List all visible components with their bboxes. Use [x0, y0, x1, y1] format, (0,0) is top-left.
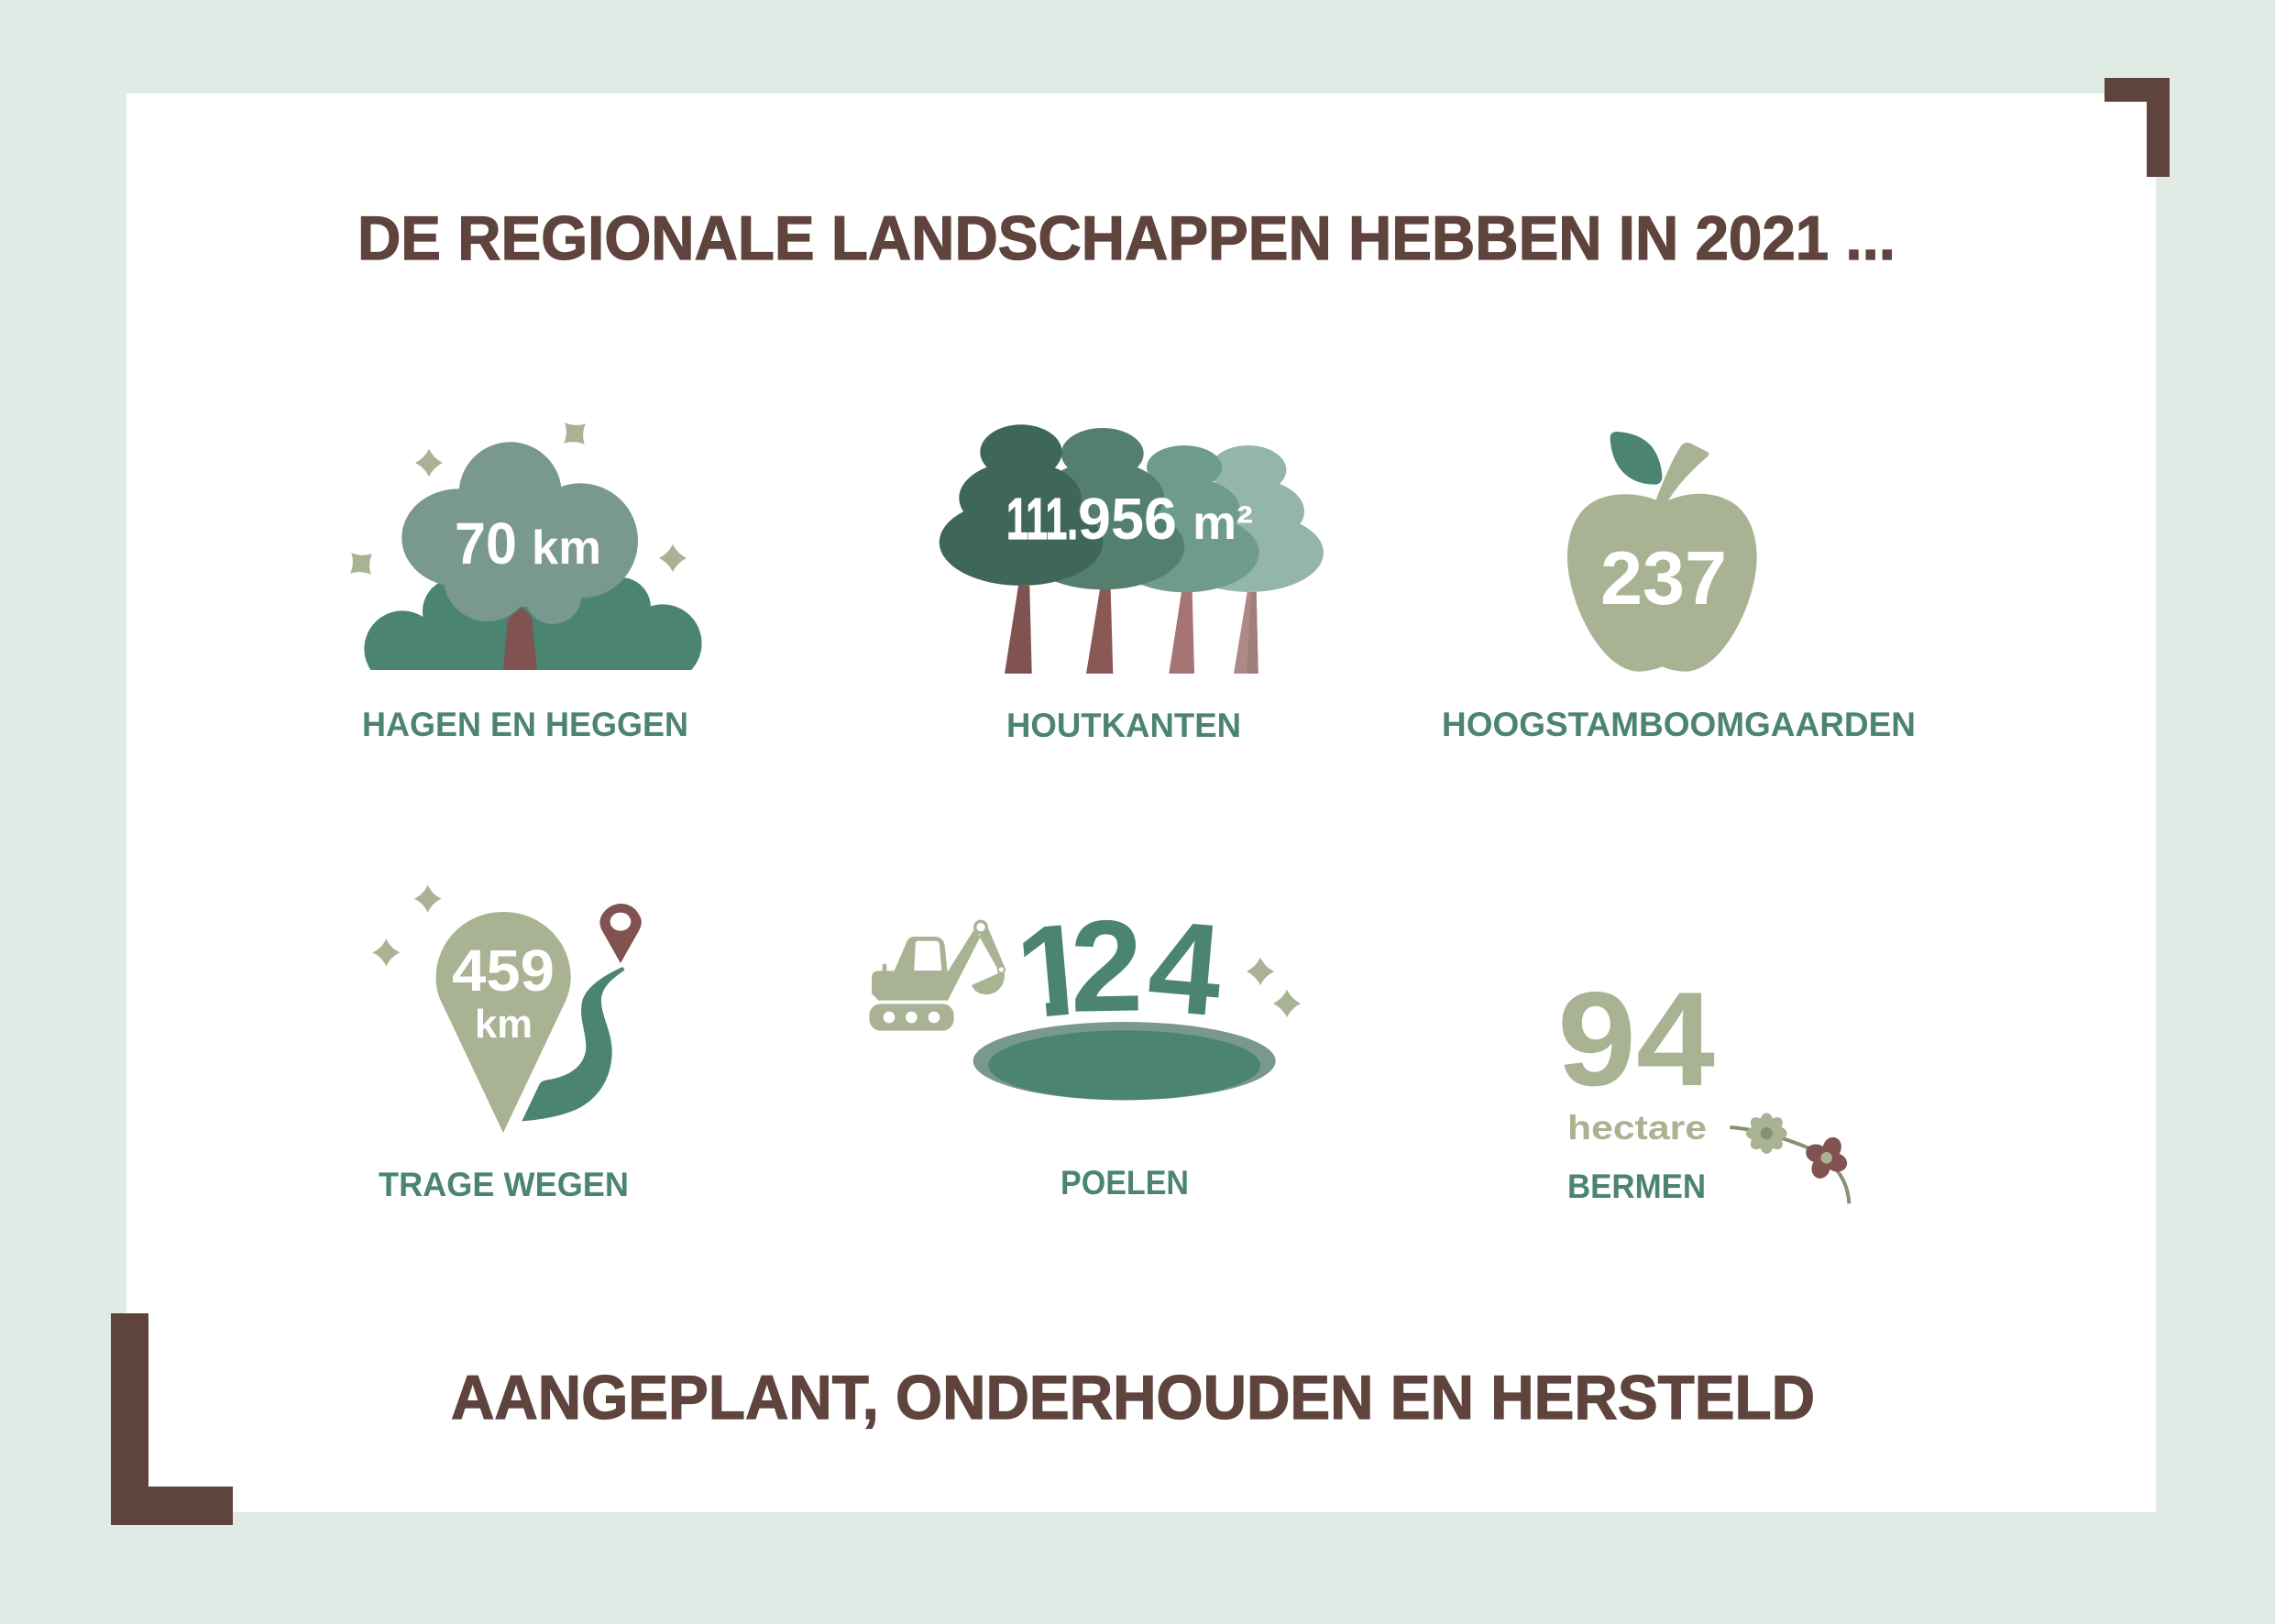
corner bracket: top right: [2105, 78, 2170, 177]
icon: tree 1: [940, 424, 1103, 674]
unit: hectare: hectare: [1567, 1109, 1707, 1147]
label: houtkanten: HOUTKANTEN: [1006, 707, 1241, 744]
label: trage wegen: TRAGE WEGEN: [379, 1166, 629, 1203]
excavator window: [914, 941, 941, 971]
icon: flowers on stem: [1730, 1113, 1850, 1203]
icon: tree 2: [1021, 428, 1184, 674]
value: 459 km: 459: [452, 938, 555, 1004]
excavator bucket: [972, 973, 1005, 994]
apple body: [1567, 443, 1757, 672]
corner bracket: bottom left: [111, 1313, 233, 1525]
value: 70 km: km: [532, 521, 601, 575]
green flower: [1746, 1113, 1787, 1154]
excavator track: [869, 1004, 954, 1031]
winding road: [522, 967, 625, 1121]
sparkles: [340, 412, 687, 585]
value: 459 km: [452, 938, 555, 1047]
panel: houtkanten: [940, 424, 1324, 744]
panel: hagen en heggen: [340, 412, 702, 743]
value: 124: 1: [1011, 895, 1095, 1047]
red flower: [1803, 1135, 1850, 1181]
value: 124: 2: [1069, 893, 1144, 1040]
value: 70 km: 70: [455, 510, 517, 576]
sparkles: [1247, 958, 1301, 1017]
excavator body: [872, 928, 980, 1001]
value: 70 km: [455, 510, 601, 576]
value: 124: 4: [1143, 893, 1228, 1044]
icon: pond: [973, 1022, 1276, 1100]
stem: [1730, 1127, 1849, 1203]
value: 111.956 m²: [1006, 486, 1253, 552]
panel: bermen: [1557, 964, 1850, 1205]
icon: tree trunk: [503, 608, 537, 670]
icon: tree 4: [1175, 445, 1324, 674]
label: hagen en heggen: HAGEN EN HEGGEN: [362, 706, 688, 743]
icon: tree crown: [401, 442, 638, 624]
value: 111.956 m²: 956: [1078, 486, 1177, 552]
icon: hedge: [364, 577, 702, 670]
pond water: [988, 1030, 1260, 1100]
excavator arm: [979, 927, 1005, 971]
value: 111.956 m²: m²: [1192, 497, 1253, 550]
sparkle: [414, 885, 442, 913]
pond rim: [973, 1022, 1276, 1100]
large pin: [436, 912, 571, 1133]
excavator joints: [973, 920, 1006, 974]
closing line: AANGEPLANT, ONDERHOUDEN EN HERSTELD: [451, 1363, 1815, 1432]
value: 459 km: km: [475, 1002, 533, 1047]
label: bermen: BERMEN: [1567, 1168, 1706, 1205]
panel: trage wegen: [372, 885, 642, 1203]
icon: excavator: [869, 920, 1006, 1031]
sparkle: [372, 938, 400, 966]
apple leaf: [1610, 432, 1662, 485]
white panel: [126, 93, 2156, 1512]
value: 111.956 m²: 111.: [1006, 486, 1078, 552]
panel: poelen: [869, 920, 1301, 1195]
label: hoogstamboomgaarden: HOOGSTAMBOOMGAARDEN: [1442, 706, 1916, 743]
icon: tree 3: [1111, 445, 1259, 674]
label: poelen: POELEN: [1061, 1164, 1189, 1202]
value: 237: 237: [1600, 535, 1727, 620]
value: 94: 94: [1557, 964, 1715, 1114]
panel: hoogstamboomgaarden: [1442, 432, 1916, 743]
small pin hole: [610, 913, 631, 931]
icon: apple: [1567, 432, 1757, 672]
icon: map route: [372, 885, 642, 1133]
small pin: [599, 904, 642, 963]
title: DE REGIONALE LANDSCHAPPEN HEBBEN IN 2021 ...: [357, 203, 1896, 273]
value: 124: [1023, 920, 1220, 1016]
